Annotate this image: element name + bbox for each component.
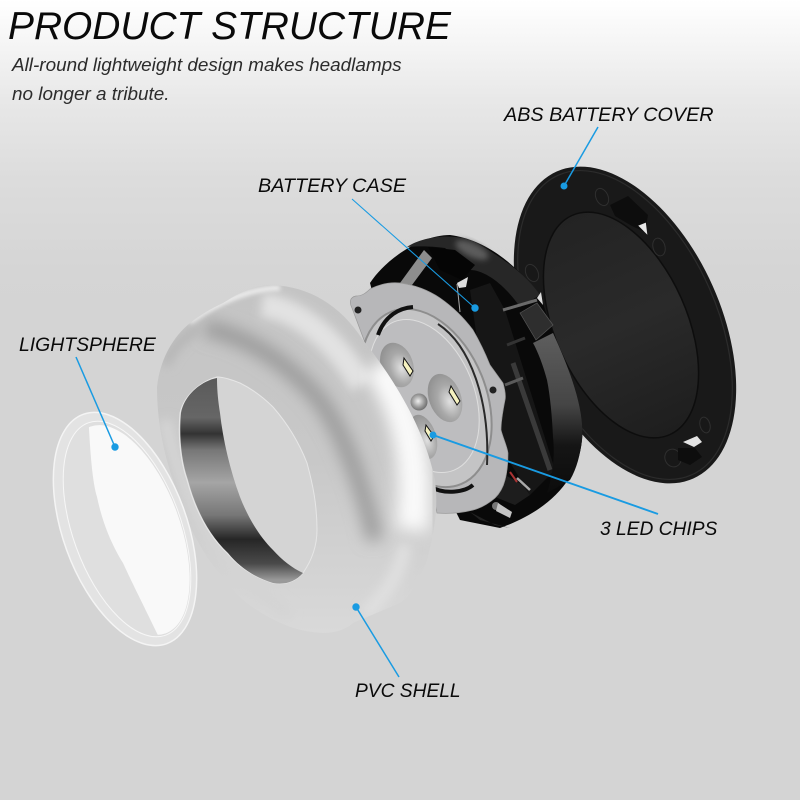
- pointer: lightsphere: [76, 357, 119, 451]
- title: PRODUCT STRUCTURE: [8, 5, 451, 48]
- label: battery case: BATTERY CASE: [258, 175, 406, 197]
- label: pvc shell: PVC SHELL: [355, 681, 461, 702]
- pointer: 3 led chips: [430, 432, 658, 514]
- top clip: [610, 196, 648, 232]
- bottom clip: [678, 436, 702, 465]
- subtitle: [11, 55, 402, 105]
- inner column: [470, 283, 555, 495]
- inner disc: [512, 189, 730, 461]
- left window: [400, 250, 432, 285]
- label: 3 led chips: 3 LED CHIPS: [600, 519, 717, 540]
- struts: [503, 300, 537, 310]
- pointer: battery case: [352, 199, 479, 312]
- block: [520, 303, 553, 340]
- pointer: pvc shell: [352, 603, 399, 677]
- label: lightsphere: LIGHTSPHERE: [19, 334, 156, 356]
- battery cover: [469, 132, 781, 518]
- pointer: abs battery cover: [560, 127, 598, 190]
- exploded product illustration: [52, 126, 736, 678]
- shell opening: [179, 377, 317, 584]
- callout pointers: [76, 127, 658, 677]
- screw bosses: [523, 186, 712, 470]
- label: abs battery cover: ABS BATTERY COVER: [504, 104, 714, 126]
- slots: [378, 307, 413, 335]
- top band: [407, 237, 540, 307]
- subtitle: no longer a tribute.: [12, 84, 170, 105]
- bottom wiring: [470, 472, 530, 528]
- subtitle: All-round lightweight design makes headlamps: [12, 55, 402, 76]
- led recesses: [374, 338, 420, 392]
- rim highlight: [474, 138, 776, 512]
- side band: [533, 333, 582, 493]
- led chips: [403, 358, 413, 376]
- silver clips: [457, 277, 468, 288]
- centre dome: [410, 394, 428, 410]
- led plate: [336, 283, 516, 513]
- battery case: [370, 235, 582, 528]
- lens centre: [89, 425, 190, 635]
- pvc shell: [157, 285, 436, 633]
- inner wall: [180, 378, 303, 584]
- lightsphere lens: [52, 412, 198, 646]
- dish: [336, 289, 516, 507]
